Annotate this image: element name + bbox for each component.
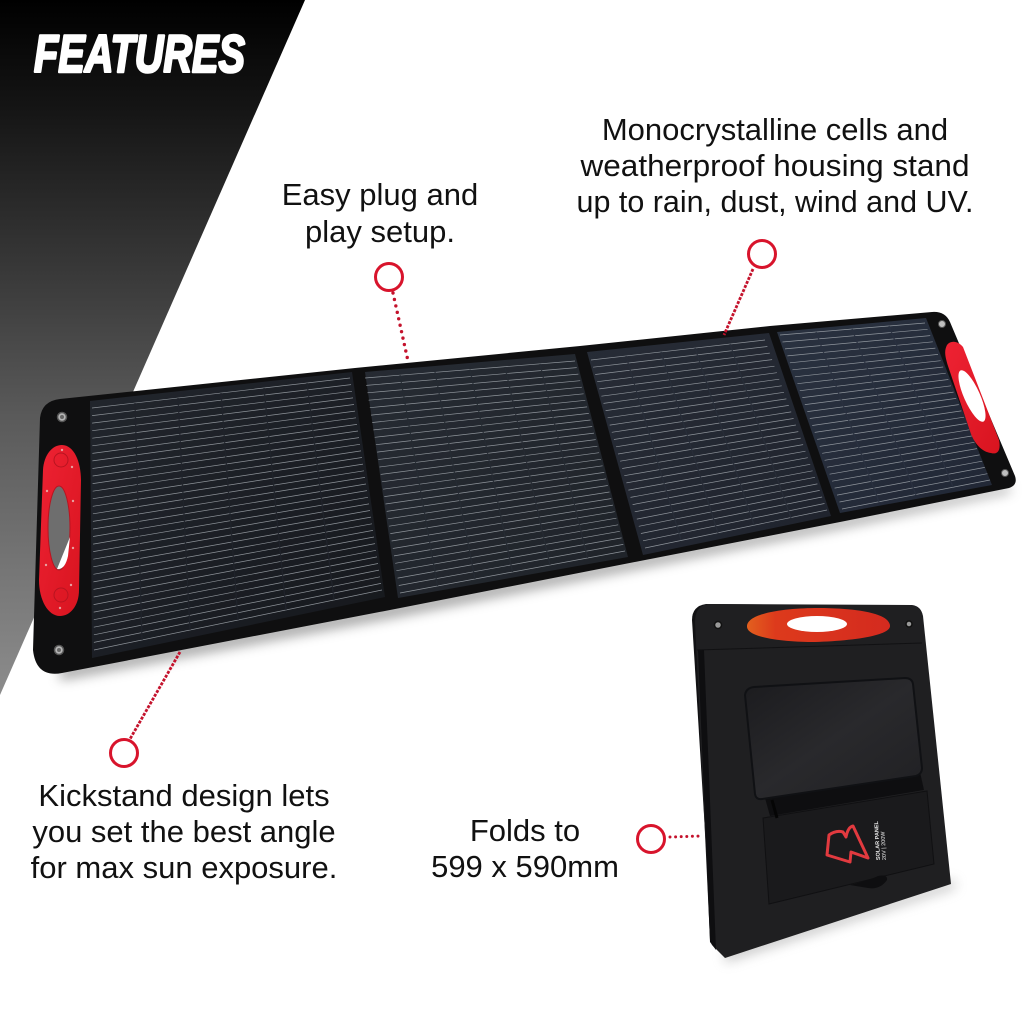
pouch label: 20V | 200W <box>880 830 888 860</box>
brand logo <box>827 826 868 862</box>
folded back layers <box>692 604 912 945</box>
callout: folds <box>638 826 702 852</box>
panel body <box>33 312 1016 674</box>
cell block 3 <box>587 333 831 555</box>
zip gap <box>765 772 924 816</box>
lower pouch <box>763 791 934 904</box>
marker ring <box>748 240 776 268</box>
marker ring <box>638 826 664 852</box>
right red handle <box>945 342 1000 453</box>
strap loop <box>850 876 887 888</box>
marker ring <box>110 740 138 766</box>
folded solar panel with pouches <box>692 604 955 962</box>
cell column gaps <box>135 326 953 640</box>
callout: kickstand <box>110 652 180 766</box>
pouch label: SOLAR PANEL <box>874 820 882 860</box>
text: plug and play <box>282 177 478 249</box>
pouch label <box>874 820 888 860</box>
cell block 2 <box>365 354 628 598</box>
text: plug and play: Easy plug and <box>282 177 478 212</box>
background: dark diagonal panel <box>0 0 305 695</box>
left red handle <box>39 445 81 616</box>
cell block 1 <box>90 372 385 658</box>
right grommets <box>938 320 1008 476</box>
text: monocrystalline cells: Monocrystalline cells and <box>602 112 948 147</box>
left grommets <box>54 412 66 654</box>
marker ring <box>376 264 402 290</box>
text: kickstand: for max sun exposure. <box>31 850 337 885</box>
carry handle <box>747 608 890 642</box>
heading: FEATURES: FEATURES <box>34 25 245 84</box>
callout: plug and play <box>376 264 408 361</box>
text: kickstand: you set the best angle <box>32 814 336 849</box>
text: folds: Folds to <box>470 813 580 848</box>
text: plug and play: play setup. <box>305 214 455 249</box>
upper pouch <box>745 678 922 799</box>
text: kickstand <box>31 778 337 885</box>
grommets <box>714 621 912 628</box>
zipper pull <box>772 800 777 818</box>
unfolded solar panel <box>33 312 1016 680</box>
text: monocrystalline cells: weatherproof housing stand <box>579 148 970 183</box>
text: kickstand: Kickstand design lets <box>38 778 330 813</box>
text: monocrystalline cells: up to rain, dust, wind and UV. <box>576 184 974 219</box>
text: monocrystalline cells <box>576 112 974 219</box>
text: folds <box>431 813 619 884</box>
folded case body <box>695 604 951 958</box>
busbar lines <box>92 323 990 650</box>
text: folds: 599 x 590mm <box>431 849 619 884</box>
callout: monocrystalline cells <box>724 240 776 335</box>
cell block 4 <box>777 318 992 513</box>
